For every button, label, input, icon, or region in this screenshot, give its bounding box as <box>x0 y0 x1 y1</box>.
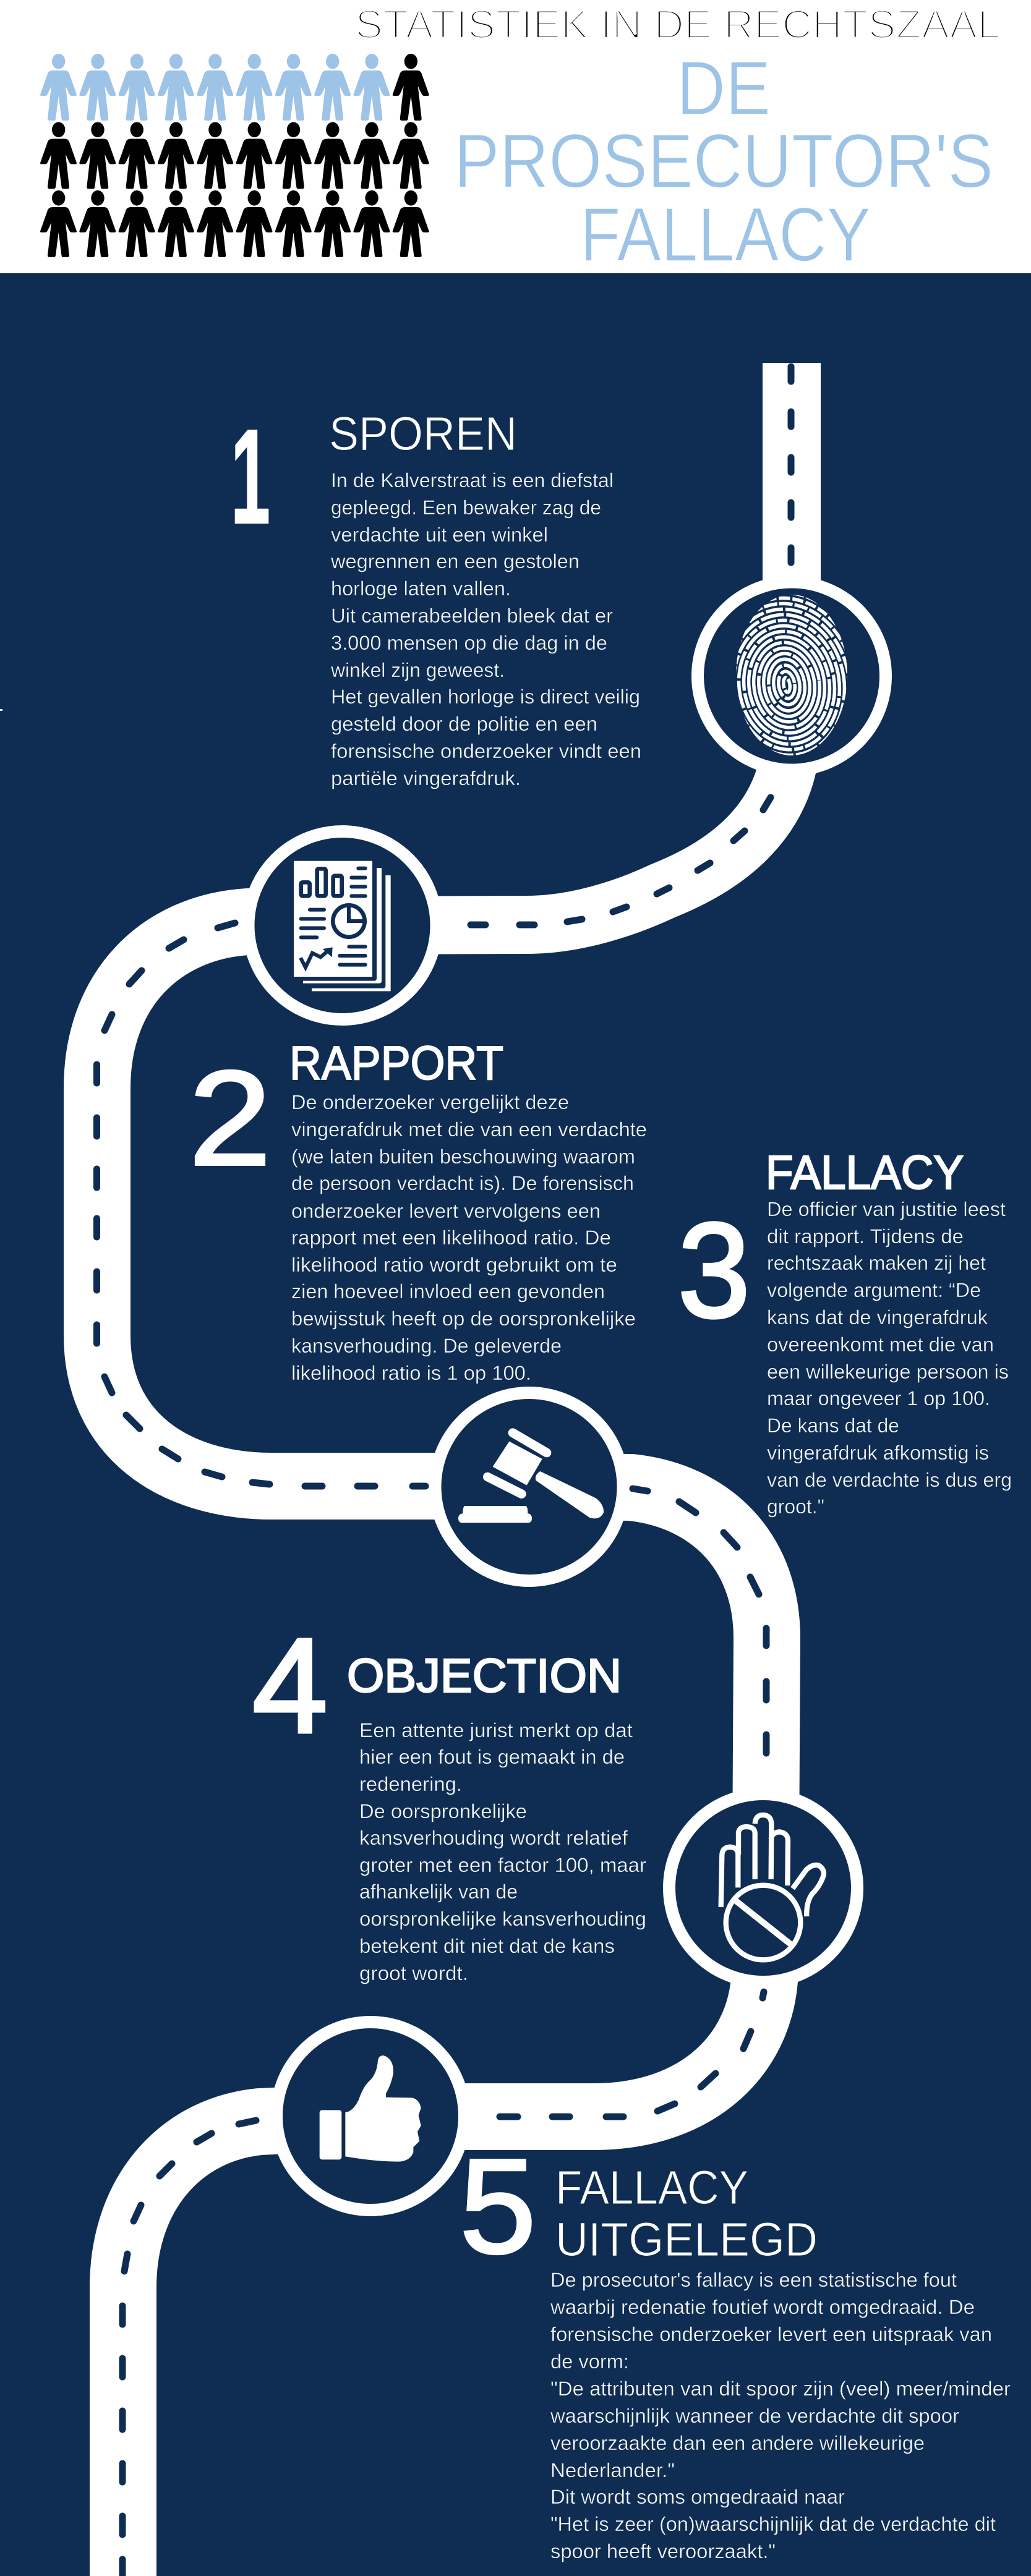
body text step 4: kansverhouding wordt relatief <box>359 1827 628 1849</box>
header background <box>0 0 1031 273</box>
body text step 3: volgende argument: “De <box>767 1279 981 1301</box>
body text step 5: spoor heeft veroorzaakt." <box>550 2540 776 2562</box>
body text step 2: (we laten buiten beschouwing waarom <box>291 1146 635 1168</box>
body text step 3: De officier van justitie leest <box>767 1198 1006 1220</box>
body text step 5: forensische onderzoeker levert een uitspraak van <box>550 2323 992 2345</box>
body text step 1 <box>330 469 641 789</box>
heading: fallacy: FALLACY <box>766 1146 964 1199</box>
body text step 1: verdachte uit een winkel <box>331 524 548 546</box>
body text step 3 <box>767 1198 1012 1518</box>
heading: sporen: SPOREN <box>329 407 517 461</box>
heading: rapport: RAPPORT <box>289 1037 503 1090</box>
step 5 panel <box>460 2132 1011 2562</box>
body text step 3: kans dat de vingerafdruk <box>767 1306 988 1328</box>
body text step 2: de persoon verdacht is). De forensisch <box>291 1172 634 1194</box>
road <box>96 363 792 2576</box>
body text step 1: Uit camerabeelden bleek dat er <box>331 605 613 627</box>
body text step 1: 3.000 mensen op die dag in de <box>331 632 607 654</box>
body text step 3: De kans dat de <box>767 1414 899 1437</box>
heading: fallacy uitgelegd: FALLACY <box>555 2161 748 2214</box>
icon: fingerprint <box>697 582 886 788</box>
body text step 3: vingerafdruk afkomstig is <box>767 1442 989 1464</box>
icon: stop hand <box>669 1794 857 1982</box>
icon: report <box>249 831 437 1019</box>
body text step 4: redenering. <box>359 1773 462 1795</box>
body text step 4: betekent dit niet dat de kans <box>359 1935 615 1957</box>
body text step 2 <box>291 1091 647 1384</box>
body text step 5: waarbij redenatie foutief wordt omgedraaid. De <box>550 2296 975 2318</box>
body text step 2: rapport met een likelihood ratio. De <box>291 1226 611 1249</box>
body text step 4: De oorspronkelijke <box>359 1800 527 1822</box>
body text step 1: wegrennen en een gestolen <box>330 550 580 572</box>
step 2 panel <box>189 1037 647 1384</box>
step 1 panel <box>231 402 641 789</box>
body text step 1: gesteld door de politie en een <box>331 713 597 735</box>
heading: fallacy uitgelegd: UITGELEGD <box>555 2213 818 2266</box>
body text step 4 <box>359 1719 646 1984</box>
body text step 3: van de verdachte is dus erg <box>767 1469 1012 1491</box>
body text step 2: onderzoeker levert vervolgens een <box>291 1200 601 1222</box>
body text step 3: overeenkomt met die van <box>767 1333 994 1356</box>
body text step 5: Nederlander." <box>550 2459 675 2481</box>
body text step 5: Dit wordt soms omgedraaid naar <box>550 2486 845 2508</box>
body text step 1: partiële vingerafdruk. <box>331 767 521 789</box>
body text step 2: likelihood ratio wordt gebruikt om te <box>291 1254 617 1276</box>
body text step 1: Het gevallen horloge is direct veilig <box>331 686 640 708</box>
number 5: 5 <box>460 2132 536 2282</box>
body text step 2: De onderzoeker vergelijkt deze <box>291 1091 569 1113</box>
body text step 2: likelihood ratio is 1 op 100. <box>291 1362 531 1384</box>
body text step 3: dit rapport. Tijdens de <box>767 1225 964 1248</box>
body text step 4: Een attente jurist merkt op dat <box>359 1719 633 1741</box>
body text step 4: oorspronkelijke kansverhouding <box>359 1908 646 1930</box>
body text step 5: De prosecutor's fallacy is een statistische fout <box>550 2269 957 2291</box>
body text step 3: een willekeurige persoon is <box>767 1361 1009 1383</box>
body text step 3: maar ongeveer 1 op 100. <box>767 1387 990 1409</box>
body text step 4: afhankelijk van de <box>359 1881 518 1903</box>
title: DE <box>677 46 771 131</box>
body text step 2: vingerafdruk met die van een verdachte <box>291 1118 647 1141</box>
body text step 1: In de Kalverstraat is een diefstal <box>331 469 614 491</box>
body text step 4: hier een fout is gemaakt in de <box>359 1746 625 1768</box>
body text step 1: forensische onderzoeker vindt een <box>331 740 641 762</box>
body text step 2: zien hoeveel invloed een gevonden <box>291 1280 605 1303</box>
icon: thumbs up <box>276 2022 464 2210</box>
icon: gavel <box>435 1393 623 1581</box>
body text step 5 <box>550 2269 1011 2562</box>
step 3 panel <box>678 1146 1012 1518</box>
body text step 2: kansverhouding. De geleverde <box>291 1335 562 1357</box>
heading: fallacy uitgelegd <box>555 2161 818 2266</box>
number 4: 4 <box>252 1611 328 1761</box>
body text step 1: gepleegd. Een bewaker zag de <box>331 496 601 519</box>
body text step 3: groot." <box>767 1495 824 1518</box>
heading: objection: OBJECTION <box>347 1649 622 1702</box>
number 2: 2 <box>189 1044 272 1194</box>
body text step 1: horloge laten vallen. <box>331 577 511 600</box>
body text step 5: "Het is zeer (on)waarschijnlijk dat de verdachte dit <box>550 2513 996 2535</box>
body text step 1: winkel zijn geweest. <box>330 659 505 681</box>
body text step 3: rechtszaak maken zij het <box>767 1252 986 1274</box>
body text step 5: veroorzaakte dan een andere willekeurige <box>550 2432 925 2454</box>
body text step 5: "De attributen van dit spoor zijn (veel) meer/minder <box>550 2378 1011 2400</box>
number 3: 3 <box>678 1196 750 1346</box>
step 4 panel <box>252 1611 646 1984</box>
title <box>454 46 993 278</box>
body text step 5: waarschijnlijk wanneer de verdachte dit spoor <box>550 2405 959 2427</box>
people pictogram: 9 of 30 highlighted <box>40 54 429 257</box>
body text step 4: groter met een factor 100, maar <box>359 1854 646 1876</box>
body text step 4: groot wordt. <box>359 1962 468 1984</box>
title: FALLACY <box>580 193 871 278</box>
number 1: 1 <box>231 402 270 552</box>
body text step 5: de vorm: <box>550 2350 629 2373</box>
body text step 2: bewijsstuk heeft op de oorspronkelijke <box>291 1307 636 1330</box>
subtitle: STATISTIEK IN DE RECHTSZAAL <box>355 1 1001 47</box>
